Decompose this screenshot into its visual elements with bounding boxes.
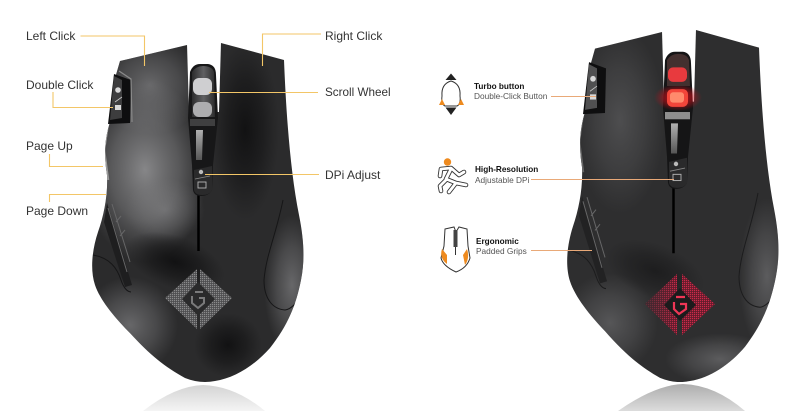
callout: page down: Page Down (26, 204, 88, 218)
reflection under right mouse (618, 384, 745, 411)
left diamond logo (165, 269, 232, 329)
callout: page down (26, 194, 106, 218)
icon: rocket with arrows (439, 74, 464, 115)
callout: page up: Page Up (26, 139, 73, 153)
red diamond logo (645, 274, 715, 335)
callout: double click (26, 78, 113, 108)
reflection under left mouse (143, 385, 265, 411)
right feature list (439, 74, 674, 272)
feature: high resolution: Adjustable DPi (475, 175, 530, 185)
callout: double click: Double Click (26, 78, 94, 92)
feature: high resolution (440, 158, 674, 192)
callout: right click: Right Click (325, 29, 383, 43)
left mouse body (92, 43, 304, 382)
right mouse body (567, 30, 778, 382)
turbo side button (583, 62, 606, 114)
DPI adjust button (194, 166, 212, 195)
icon: mouse outline (441, 227, 470, 272)
scroll wheel (188, 64, 218, 196)
right mouse illustration (562, 27, 795, 411)
callout: scroll wheel: Scroll Wheel (325, 86, 391, 99)
right DPI button (669, 158, 687, 188)
callout: left click: Left Click (26, 29, 76, 43)
feature: turbo button: Double-Click Button (474, 91, 548, 101)
text: ergonomic: Ergonomic (476, 237, 519, 246)
feature: ergonomic (441, 227, 592, 272)
text: high resolution: High-Resolution (475, 165, 538, 174)
text: turbo button: Turbo button (474, 82, 524, 91)
white gap between right mouse buttons (662, 29, 696, 102)
double click side button (108, 71, 132, 124)
feature: ergonomic: Padded Grips (476, 246, 527, 256)
callout: left click (26, 29, 144, 66)
left callouts (26, 29, 391, 218)
white gap between buttons (187, 42, 221, 112)
callout: page up (26, 139, 103, 166)
lit red scroll wheel (654, 52, 702, 189)
icon: running figure (440, 158, 466, 192)
feature: turbo button (439, 74, 596, 115)
callout: dpi adjust: DPi Adjust (325, 168, 381, 182)
left mouse illustration (92, 43, 304, 411)
callout: right click (262, 29, 383, 66)
